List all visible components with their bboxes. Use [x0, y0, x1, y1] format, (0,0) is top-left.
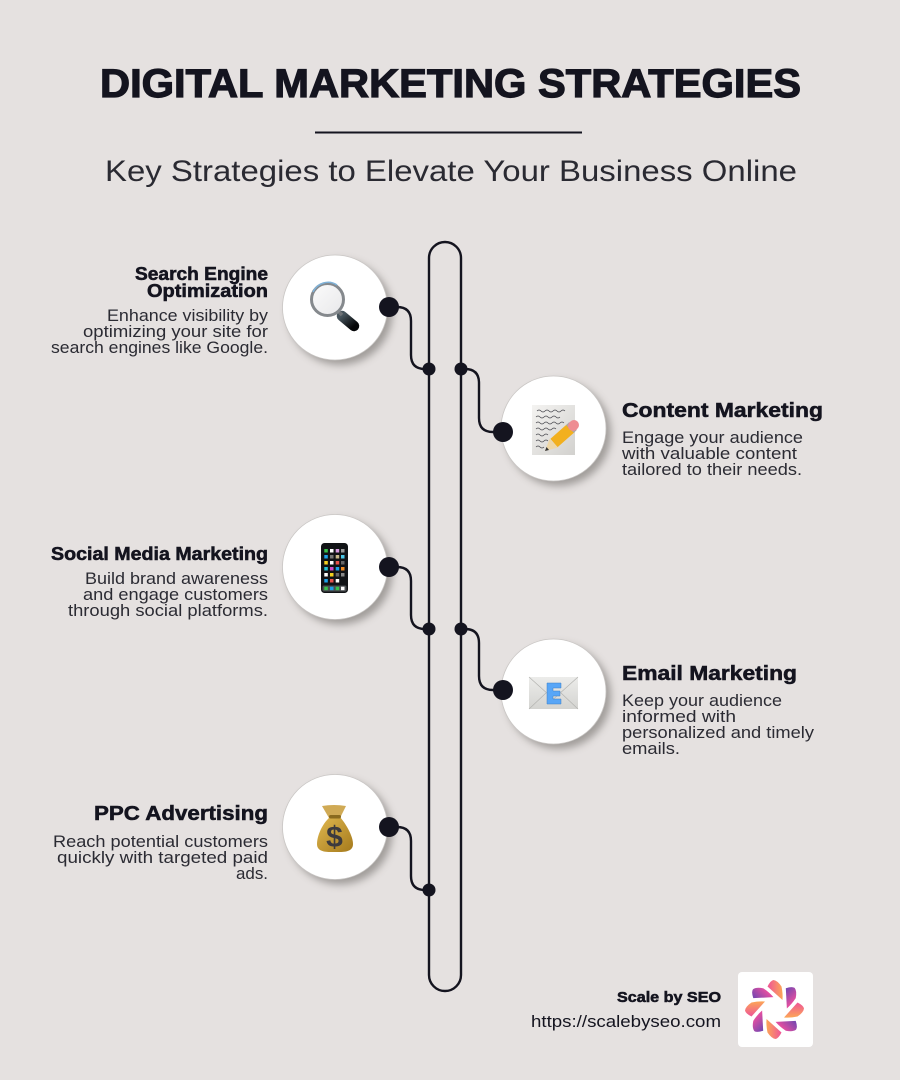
- icon: money bag: [317, 805, 353, 854]
- social media description: Build brand awareness: [85, 570, 268, 588]
- title: DIGITAL MARKETING STRATEGIES: [100, 62, 801, 106]
- node dot: [379, 557, 399, 577]
- social media heading: Social Media Marketing: [51, 543, 268, 564]
- SEO heading: Search Engine: [135, 263, 268, 284]
- ppc description: Reach potential customers: [53, 833, 268, 851]
- icon: money bag: $: [326, 821, 343, 854]
- social media description: and engage customers: [83, 586, 268, 604]
- logo: [738, 972, 813, 1047]
- email heading: Email Marketing: [622, 662, 797, 685]
- content marketing description: tailored to their needs.: [622, 461, 802, 479]
- icon: smartphone: [321, 543, 348, 593]
- social media description: [68, 570, 268, 620]
- SEO description: [51, 307, 269, 357]
- panel: ppc advertising: [53, 774, 399, 884]
- node dot: [379, 817, 399, 837]
- SEO heading: Optimization: [147, 280, 268, 301]
- SEO description: search engines like Google.: [51, 339, 268, 357]
- panel: social media marketing: [51, 514, 399, 624]
- central timeline track: [429, 242, 461, 991]
- content marketing description: [621, 429, 803, 479]
- footer url: https://scalebyseo.com: [531, 1013, 721, 1031]
- email description: [622, 692, 815, 758]
- icon: envelope with E: [529, 677, 578, 709]
- icon: magnifying glass: [312, 282, 354, 326]
- panel: email marketing: [493, 639, 815, 758]
- footer brand name: Scale by SEO: [617, 989, 721, 1006]
- email description: informed with: [622, 708, 736, 726]
- SEO heading: [135, 263, 268, 301]
- ppc heading: PPC Advertising: [94, 802, 268, 825]
- content marketing heading: Content Marketing: [622, 399, 823, 422]
- ppc description: [53, 833, 268, 883]
- SEO description: optimizing your site for: [83, 323, 269, 341]
- icon: memo and pencil: [532, 405, 575, 455]
- ppc description: ads.: [236, 865, 268, 883]
- email description: personalized and timely: [622, 724, 815, 742]
- content marketing description: Engage your audience: [622, 429, 803, 447]
- panel: content marketing: [493, 376, 823, 486]
- email description: emails.: [622, 740, 680, 758]
- node dot: [493, 680, 513, 700]
- SEO description: Enhance visibility by: [107, 307, 269, 325]
- ppc description: quickly with targeted paid: [57, 849, 268, 867]
- panel: search engine optimization: [51, 255, 399, 365]
- subtitle: Key Strategies to Elevate Your Business Online: [105, 155, 797, 188]
- node dot: [493, 422, 513, 442]
- social media description: through social platforms.: [68, 602, 268, 620]
- connectors and junction dots: [389, 307, 503, 896]
- email description: Keep your audience: [622, 692, 782, 710]
- node dot: [379, 297, 399, 317]
- content marketing description: with valuable content: [621, 445, 798, 463]
